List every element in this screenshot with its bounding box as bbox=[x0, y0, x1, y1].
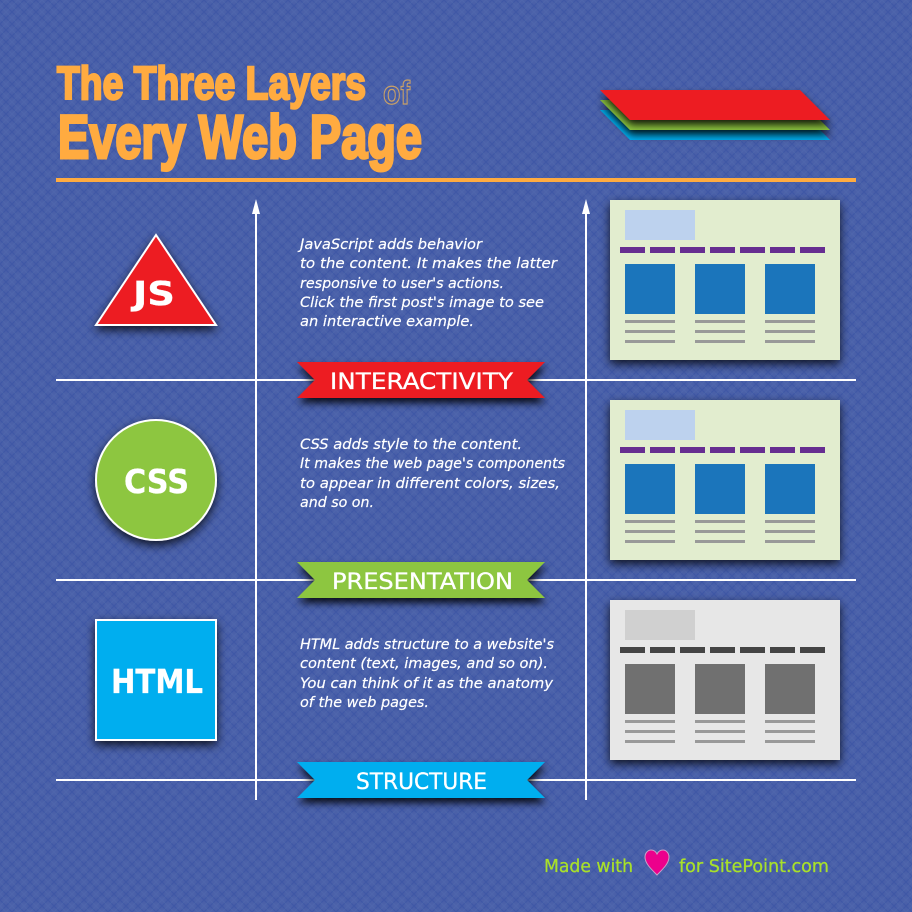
title: Every Web Page bbox=[58, 103, 422, 171]
text: HTML description: content (text, images, and so on). bbox=[300, 656, 548, 672]
title: of bbox=[383, 74, 411, 111]
icon: CSS circle bbox=[96, 420, 216, 540]
ribbon: interactivity bbox=[297, 362, 545, 398]
text: HTML description: HTML adds structure to a website's bbox=[300, 637, 554, 653]
text: JavaScript description: JavaScript adds behavior bbox=[297, 237, 483, 253]
text: JavaScript description: Click the first post's image to see bbox=[300, 295, 544, 311]
footer credit: Made with bbox=[544, 856, 633, 877]
icon: HTML square bbox=[96, 620, 216, 740]
arrow: right vertical axis bbox=[582, 199, 590, 800]
icon: stacked layers bbox=[600, 90, 830, 140]
text: CSS description: It makes the web page's components bbox=[300, 456, 565, 472]
footer credit: for SitePoint.com bbox=[679, 856, 829, 877]
title bbox=[57, 57, 422, 171]
text: HTML description: of the web pages. bbox=[300, 695, 429, 711]
text: CSS description: CSS adds style to the content. bbox=[300, 437, 522, 453]
footer credit bbox=[544, 850, 829, 877]
ribbon: interactivity: INTERACTIVITY bbox=[330, 370, 514, 395]
text: HTML description: You can think of it as the anatomy bbox=[300, 676, 554, 692]
icon: HTML square: HTML bbox=[111, 662, 203, 701]
text: HTML description bbox=[300, 637, 554, 711]
ribbon: structure: STRUCTURE bbox=[356, 770, 487, 795]
icon: CSS circle: CSS bbox=[124, 462, 189, 501]
text: CSS description bbox=[300, 437, 565, 511]
ribbon: presentation bbox=[297, 562, 545, 598]
ribbon: presentation: PRESENTATION bbox=[332, 570, 513, 595]
icon: JS triangle bbox=[96, 235, 216, 325]
card: presentation page mockup bbox=[610, 400, 840, 560]
text: CSS description: to appear in different colors, sizes, bbox=[300, 476, 560, 492]
text: JavaScript description: to the content. It makes the latter bbox=[300, 256, 558, 272]
ribbon: structure bbox=[297, 762, 545, 798]
text: JavaScript description: responsive to user's actions. bbox=[300, 276, 504, 292]
text: JavaScript description: an interactive example. bbox=[300, 314, 474, 330]
text: CSS description: and so on. bbox=[300, 495, 374, 511]
arrow: left vertical axis bbox=[252, 199, 260, 800]
text: JavaScript description bbox=[297, 237, 558, 330]
title: The Three Layers bbox=[57, 57, 366, 109]
card: interactivity page mockup bbox=[610, 200, 840, 360]
icon: JS triangle: JS bbox=[131, 274, 175, 313]
card: structure page mockup bbox=[610, 600, 840, 760]
